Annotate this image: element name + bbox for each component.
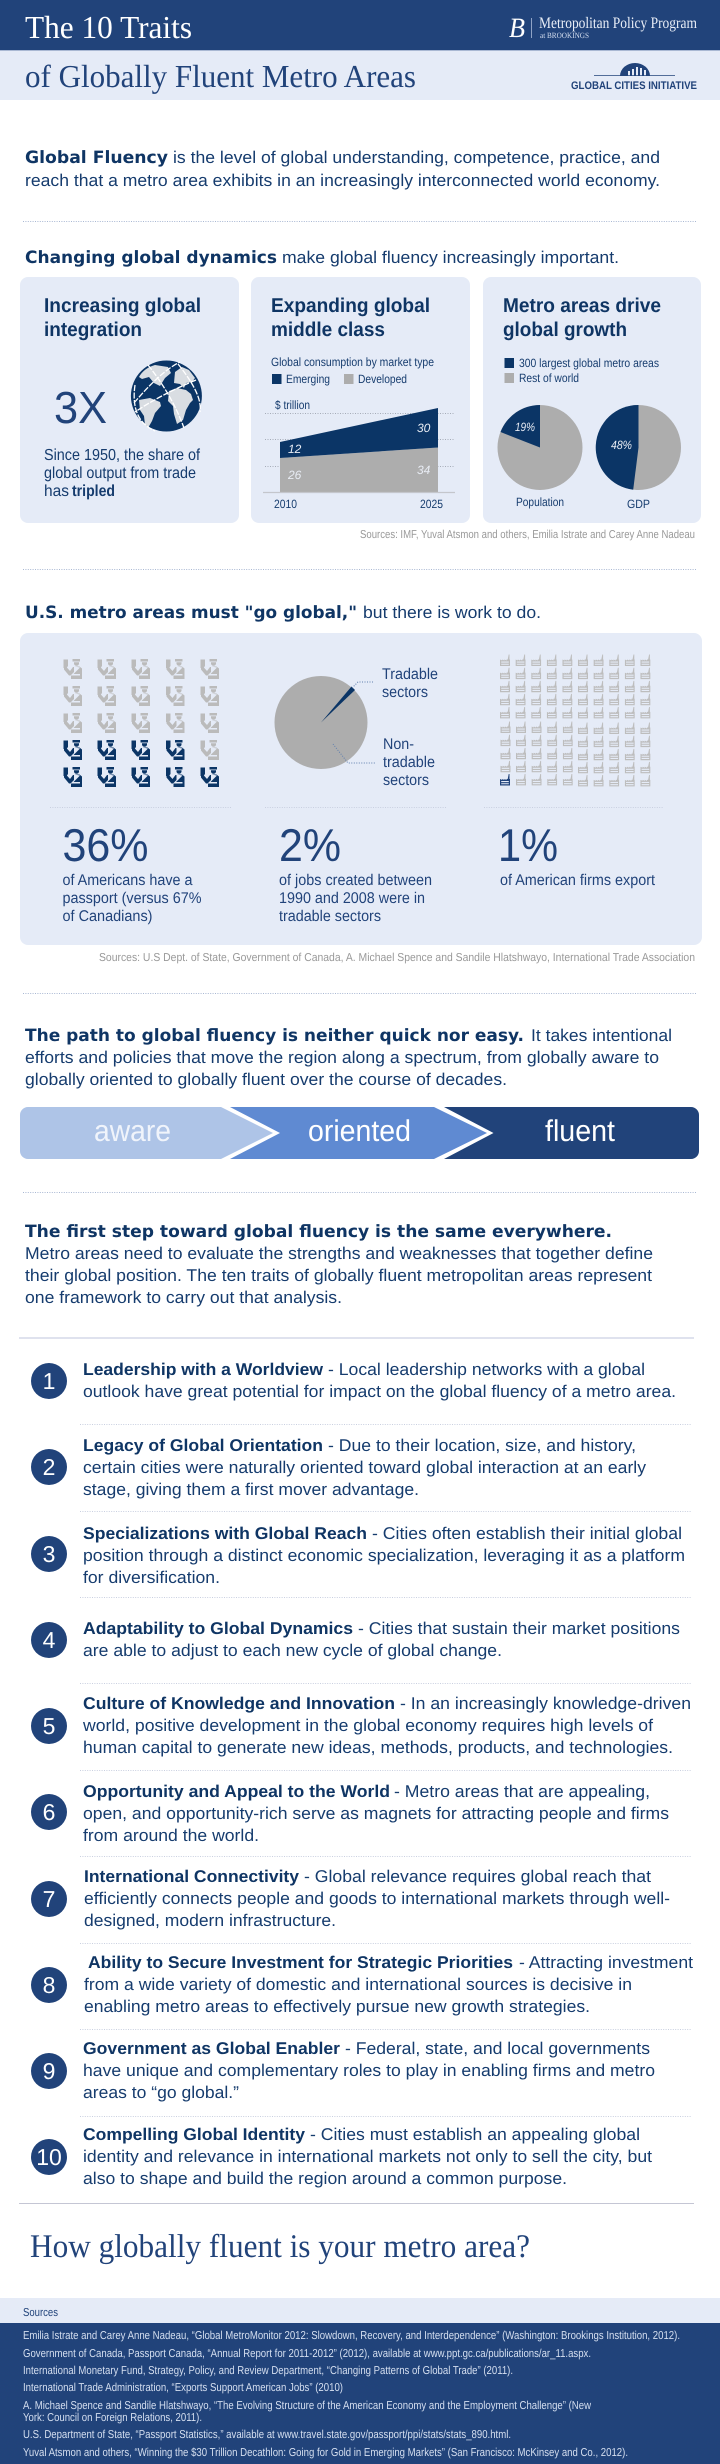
trait 6: open, and opportunity-rich serve as magnets for attracting people and firms (83, 1804, 669, 1823)
chart legend: market type: Developed (358, 372, 407, 386)
panel: increasing global integration: Since 1950, the share of (44, 447, 200, 464)
stat: 36% passports (62, 819, 202, 925)
sources list: International Monetary Fund, Strategy, Policy, and Review Department, “Changing Patterns of Global Trade” (2011). (23, 2365, 513, 2377)
trait 8: enabling metro areas to effectively pursue new growth strategies. (84, 1997, 590, 2016)
trait 5 (31, 1694, 691, 1757)
chart legend: metro areas: Rest of world (519, 371, 579, 385)
panel: expanding global middle class: middle class (271, 319, 385, 341)
trait 3: position through a distinct economic specialization, leveraging it as a platform (83, 1546, 685, 1565)
intro text: global fluency definition (25, 148, 660, 190)
stat: 36% passports: passport (versus 67% (62, 890, 202, 907)
trait 2: - Due to their location, size, and history, (328, 1436, 636, 1455)
trait 10: also to shape and build the region around a common purpose. (83, 2169, 567, 2188)
pie chart: GDP: GDP (627, 497, 650, 511)
text block: path to global fluency: efforts and policies that move the region along a spectrum, from globally aware to (25, 1048, 659, 1067)
area chart: global consumption: 2010 (274, 497, 297, 511)
trait 7: - Global relevance requires global reach that (304, 1867, 651, 1886)
heading: changing global dynamics: Changing global dynamics (25, 248, 277, 268)
stat: 36% passports: 36% (62, 819, 148, 871)
trait 8: Ability to Secure Investment for Strategic Priorities (88, 1953, 513, 1972)
panel: increasing global integration (20, 277, 239, 523)
trait 7 (31, 1867, 670, 1930)
panel: increasing global integration: tripled (72, 483, 115, 500)
trait 6: Opportunity and Appeal to the World (83, 1782, 390, 1801)
trait 6: 6 (43, 1799, 55, 1825)
chart legend: market type: Emerging (286, 372, 330, 386)
pie chart: tradable sectors: tradable (383, 754, 435, 771)
pie chart: GDP (596, 405, 681, 511)
stat: 2% tradable jobs: 1990 and 2008 were in (279, 890, 425, 907)
panel: U.S. statistics (20, 633, 702, 945)
panel: increasing global integration: 3X (54, 382, 107, 433)
text block: path to global fluency (25, 1026, 672, 1089)
area chart: global consumption: 34 (417, 463, 431, 477)
pie chart: GDP: 48% (611, 438, 632, 452)
sources list: International Trade Administration, “Exports Support American Jobs” (2010) (23, 2382, 343, 2394)
trait 6: from around the world. (83, 1826, 259, 1845)
trait 6 (31, 1782, 669, 1845)
chart legend: market type (271, 355, 434, 386)
trait 9: - Federal, state, and local governments (345, 2039, 650, 2058)
trait 2 (31, 1436, 647, 1499)
trait 5: Culture of Knowledge and Innovation (83, 1694, 395, 1713)
trait 8: 8 (43, 1972, 55, 1998)
heading: go global: but there is work to do. (363, 603, 541, 622)
trait 7: 7 (43, 1886, 55, 1912)
heading: changing global dynamics (25, 248, 619, 268)
spectrum arrows: aware, oriented, fluent (20, 1107, 699, 1159)
trait 10: 10 (36, 2144, 62, 2170)
text block: path to global fluency: It takes intentional (531, 1026, 672, 1045)
sources list: U.S. Department of State, “Passport Statistics,” available at www.travel.state.gov/passport/ppi/stats/stats_890.html. (23, 2429, 511, 2441)
intro text: global fluency definition: Global Fluency (25, 148, 168, 168)
icon grid: factories 1% (500, 654, 650, 786)
sources heading band (0, 2298, 720, 2323)
trait 9: 9 (43, 2058, 55, 2084)
logo: Metropolitan Policy Program at Brookings (509, 13, 697, 44)
pie chart: population: Population (516, 495, 564, 509)
header band: title bottom (0, 50, 720, 100)
trait 5: world, positive development in the global economy requires high levels of (82, 1716, 653, 1735)
trait 8: from a wide variety of domestic and international sources is decisive in (84, 1975, 632, 1994)
arrow: fluent (444, 1107, 699, 1159)
trait 1: 1 (43, 1368, 55, 1394)
heading: changing global dynamics: make global fluency increasingly important. (282, 248, 619, 267)
sources list: Government of Canada, Passport Canada, “Annual Report for 2011-2012” (2012), available at www.ppt.gc.ca/publications/ar_11.aspx. (23, 2348, 591, 2360)
trait 1: - Local leadership networks with a global (328, 1360, 645, 1379)
sources list (0, 2323, 720, 2464)
pie chart: tradable sectors: sectors (382, 684, 428, 701)
trait 3: 3 (43, 1541, 55, 1567)
panel: metro areas drive global growth: Metro areas drive (503, 295, 661, 317)
icon grid: passport officers 36% (64, 659, 219, 787)
text block: first step: The first step toward global fluency is the same everywhere. (25, 1222, 612, 1242)
pie chart: population (498, 405, 582, 509)
panel: increasing global integration: integration (44, 319, 142, 341)
header band: title bottom: of Globally Fluent Metro Areas (25, 58, 416, 94)
trait 7: designed, modern infrastructure. (84, 1911, 336, 1930)
stat: 2% tradable jobs: 2% (279, 819, 341, 871)
area chart: global consumption (263, 398, 455, 511)
text block: first step: one framework to carry out that analysis. (25, 1288, 342, 1307)
arrow: aware: aware (94, 1115, 171, 1148)
trait 2: stage, giving them a first mover advantage. (83, 1480, 419, 1499)
pie chart: tradable sectors: sectors (383, 772, 429, 789)
stat: 2% tradable jobs: tradable sectors (279, 908, 381, 925)
stat: 2% tradable jobs: of jobs created between (279, 872, 432, 889)
trait 2: 2 (43, 1454, 55, 1480)
sources heading band: Sources (23, 2307, 58, 2319)
trait 4: - Cities that sustain their market positions (358, 1619, 680, 1638)
trait 10 (31, 2125, 652, 2188)
trait 5: 5 (43, 1713, 55, 1739)
trait 9: have unique and complementary roles to play in enabling firms and metro (83, 2061, 655, 2080)
trait 7: efficiently connects people and goods to international markets through well- (84, 1889, 670, 1908)
panel: increasing global integration: has (44, 483, 69, 500)
trait 6: - Metro areas that are appealing, (394, 1782, 650, 1801)
arrow: aware (20, 1107, 273, 1159)
trait 2: certain cities were naturally oriented toward global interaction at an early (83, 1458, 647, 1477)
trait 4: are able to adjust to each new cycle of global change. (83, 1641, 502, 1660)
trait 1: Leadership with a Worldview (83, 1360, 324, 1379)
trait 4: 4 (43, 1627, 56, 1653)
arrow: oriented: oriented (308, 1115, 411, 1148)
trait 9 (31, 2039, 655, 2102)
trait 3: for diversification. (83, 1568, 220, 1587)
logo: Global Cities Initiative (571, 63, 697, 92)
intro text: global fluency definition: reach that a metro area exhibits in an increasingly interconnected world economy. (25, 171, 660, 190)
pie chart: population: 19% (515, 420, 535, 434)
trait 2: Legacy of Global Orientation (83, 1436, 323, 1455)
trait 3: Specializations with Global Reach (83, 1524, 367, 1543)
text block: path to global fluency: globally oriented to globally fluent over the course of decades. (25, 1070, 507, 1089)
panel: metro areas drive global growth (483, 277, 701, 523)
header band: title top: The 10 Traits (25, 9, 192, 45)
trait 7: International Connectivity (84, 1867, 300, 1886)
trait 9: areas to “go global.” (83, 2083, 239, 2102)
text block: first step: their global position. The ten traits of globally fluent metropolitan areas represent (25, 1266, 652, 1285)
panel: increasing global integration: global output from trade (44, 465, 196, 482)
panel: increasing global integration: Increasing global (44, 295, 201, 317)
trait 8: - Attracting investment (519, 1953, 693, 1972)
logo: Metropolitan Policy Program at Brookings: at BROOKINGS (540, 31, 589, 40)
chart legend: metro areas: 300 largest global metro areas (519, 356, 659, 370)
trait 1: outlook have great potential for impact on the global fluency of a metro area. (83, 1382, 676, 1401)
sources list: A. Michael Spence and Sandile Hlatshwayo, “The Evolving Structure of the American Economy and the Employment Challenge” (New (23, 2400, 592, 2412)
area chart: global consumption: 30 (417, 421, 431, 435)
heading: go global: U.S. metro areas must "go global," (25, 603, 357, 623)
closing question: How globally fluent is your metro area? (30, 2229, 530, 2265)
panel: metro areas drive global growth: global growth (503, 319, 627, 341)
trait 5: human capital to generate new ideas, methods, products, and technologies. (83, 1738, 673, 1757)
trait 4: Adaptability to Global Dynamics (83, 1619, 353, 1638)
trait 1 (31, 1360, 676, 1401)
area chart: global consumption: 12 (288, 442, 302, 456)
pie chart: tradable sectors: Tradable (382, 666, 438, 683)
trait 8 (31, 1953, 693, 2016)
text block: first step (25, 1222, 653, 1307)
arrow: oriented (230, 1107, 487, 1159)
trait 10: - Cities must establish an appealing global (310, 2125, 640, 2144)
panel: expanding global middle class (251, 277, 470, 523)
logo: Global Cities Initiative: GLOBAL CITIES INITIATIVE (571, 80, 697, 92)
panel: expanding global middle class: Expanding global (271, 295, 430, 317)
sources list: York: Council on Foreign Relations, 2011). (23, 2412, 202, 2424)
chart legend: metro areas (504, 356, 659, 385)
stat: 1% firms export: of American firms export (500, 872, 656, 889)
arrow: fluent: fluent (545, 1115, 616, 1148)
trait 10: Compelling Global Identity (83, 2125, 306, 2144)
trait 4 (31, 1619, 680, 1660)
stat: 36% passports: of Americans have a (62, 872, 193, 889)
area chart: global consumption: 2025 (420, 497, 443, 511)
stat: 1% firms export: 1% (498, 819, 558, 871)
trait 5: - In an increasingly knowledge-driven (400, 1694, 691, 1713)
text block: first step: Metro areas need to evaluate the strengths and weaknesses that together define (25, 1244, 653, 1263)
trait 9: Government as Global Enabler (83, 2039, 340, 2058)
logo: Metropolitan Policy Program at Brookings: B (509, 13, 525, 44)
area chart: global consumption: $ trillion (275, 398, 310, 412)
chart legend: market type: Global consumption by market type (271, 355, 434, 369)
stat: 36% passports: of Canadians) (62, 908, 152, 925)
trait 3: - Cities often establish their initial global (372, 1524, 682, 1543)
text block: path to global fluency: The path to global fluency is neither quick nor easy. (25, 1026, 524, 1046)
pie chart: tradable sectors (274, 666, 438, 789)
trait 3 (31, 1524, 685, 1587)
header band: title top (0, 0, 720, 50)
icon: globe (131, 360, 202, 432)
pie chart: tradable sectors: Non- (383, 736, 414, 753)
trait 10: identity and relevance in international markets not only to sell the city, but (83, 2147, 652, 2166)
heading: go global (25, 603, 541, 623)
area chart: global consumption: 26 (287, 468, 302, 482)
intro text: global fluency definition: is the level of global understanding, competence, practice, and (173, 148, 660, 167)
stat: 2% tradable jobs (279, 819, 432, 925)
stat: 1% firms export (498, 819, 656, 889)
